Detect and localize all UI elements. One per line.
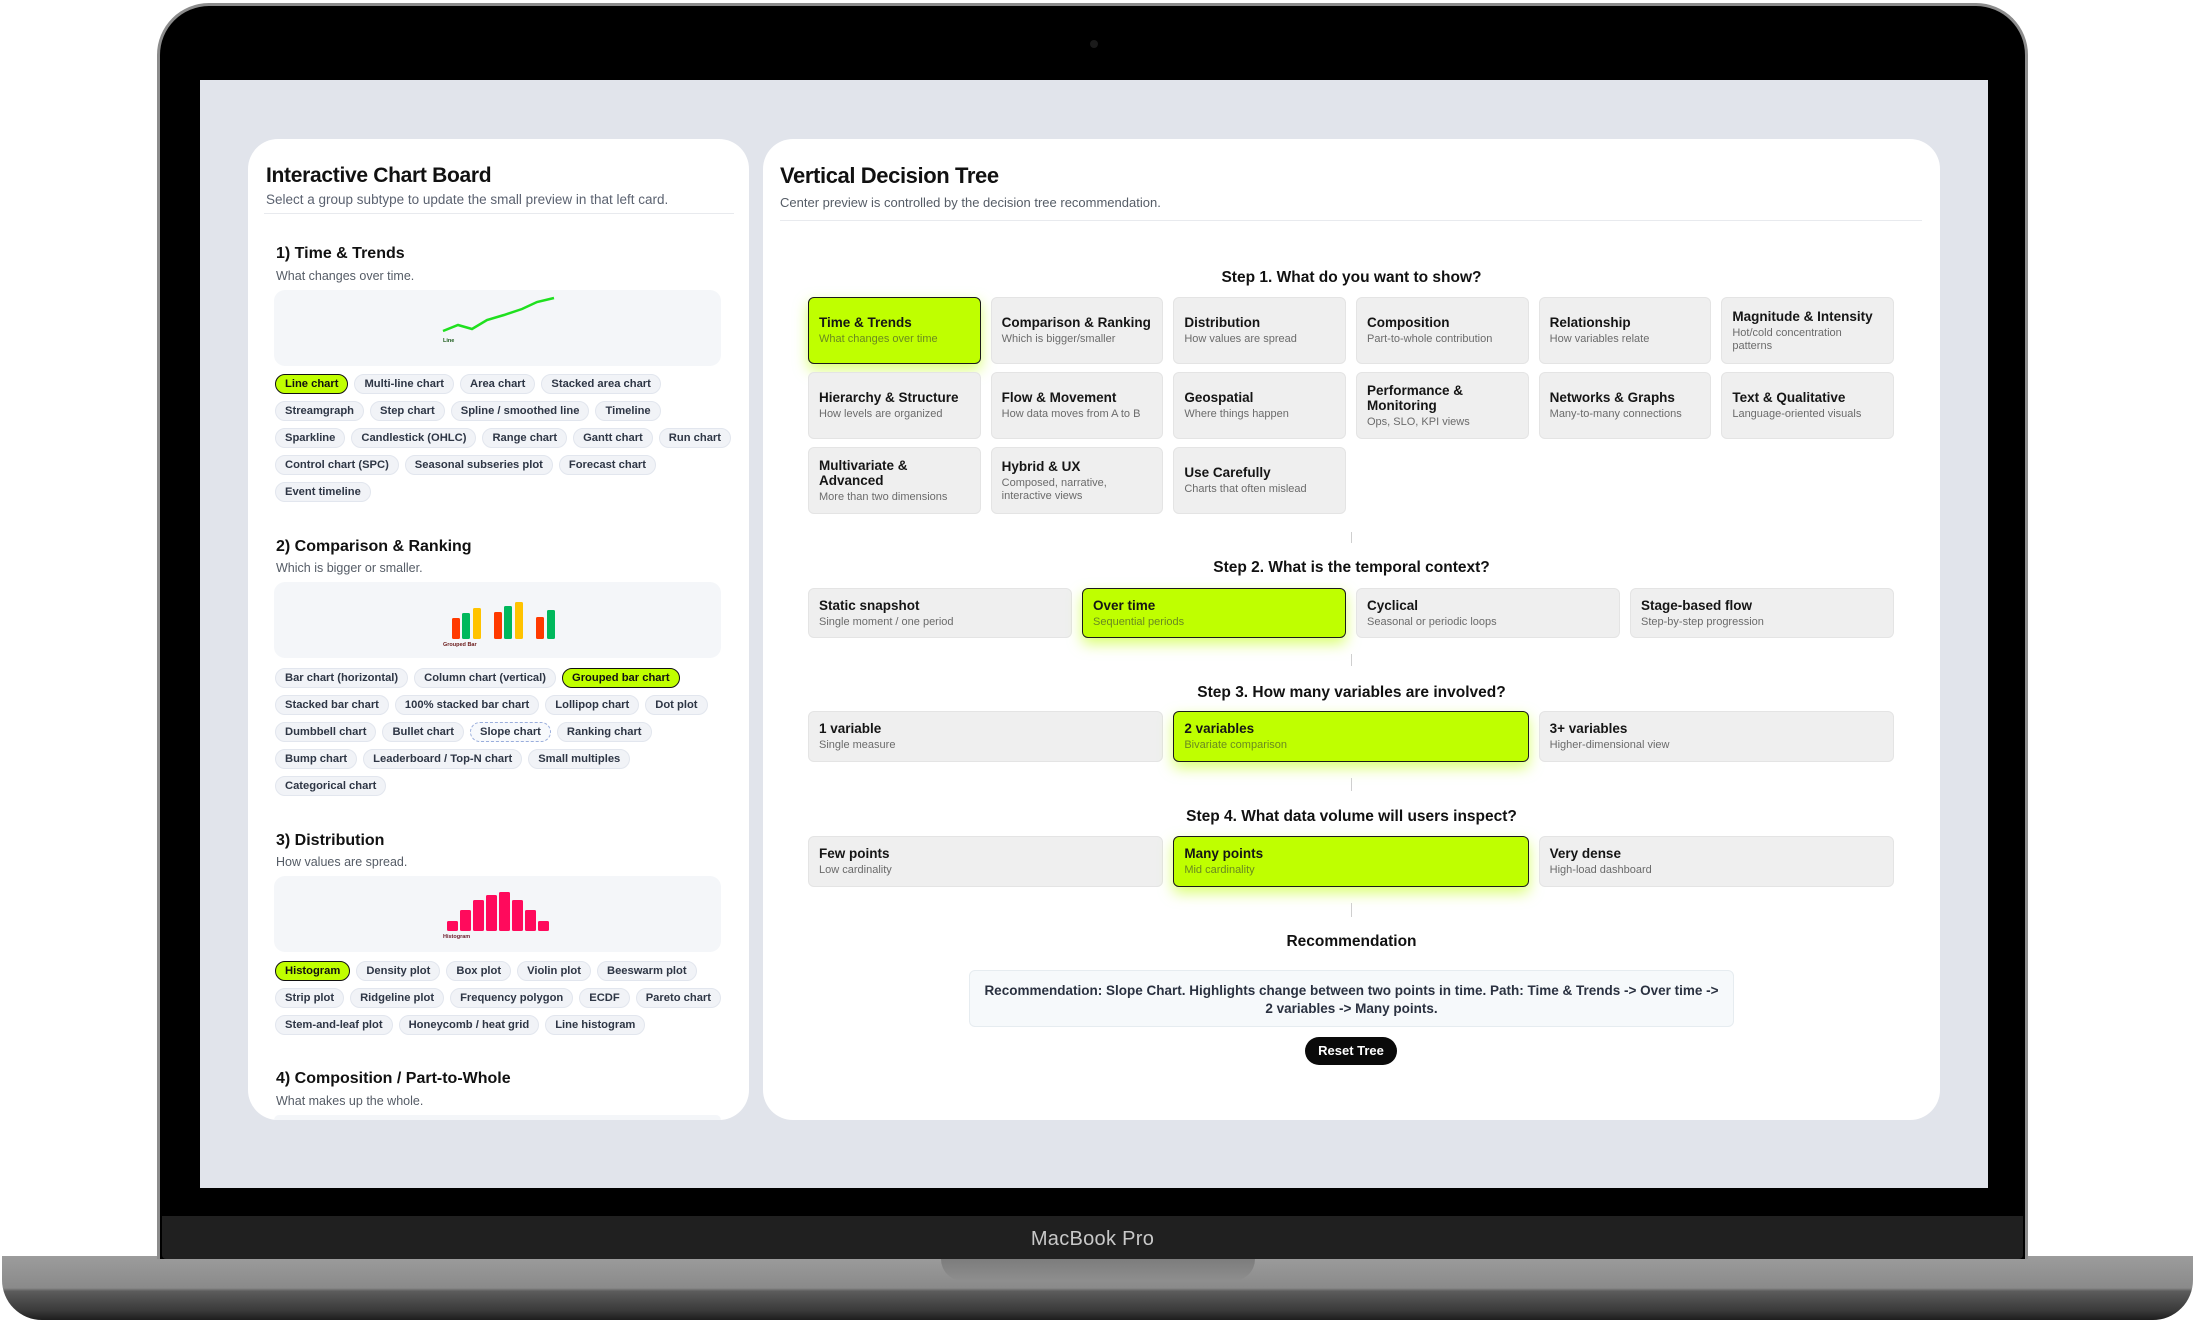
step 1 options grid: What changes over time bbox=[819, 333, 938, 345]
chips: distribution: Violin plot bbox=[527, 965, 581, 977]
chips: comparison: Bullet chart bbox=[392, 726, 454, 738]
chips: distribution: Frequency polygon bbox=[460, 992, 563, 1004]
chips: distribution: Histogram bbox=[285, 965, 340, 977]
step 1 options grid: Part-to-whole contribution bbox=[1367, 333, 1492, 345]
button: Reset Tree bbox=[1305, 1037, 1397, 1065]
recommendation heading: Recommendation bbox=[1286, 933, 1417, 950]
chin bbox=[162, 1216, 2023, 1259]
title: Interactive Chart Board: Interactive Chart Board bbox=[266, 164, 491, 187]
step 1 options grid: Which is bigger/smaller bbox=[1002, 333, 1115, 345]
camera bbox=[1090, 40, 1098, 48]
step 1 options grid: Distribution bbox=[1184, 315, 1260, 330]
chips: distribution: ECDF bbox=[589, 992, 620, 1004]
base notch bbox=[941, 1256, 1255, 1281]
chips: comparison: Stacked bar chart bbox=[285, 699, 379, 711]
step 4 options: Low cardinality bbox=[819, 864, 892, 876]
step 3 options: 2 variables bbox=[1184, 721, 1254, 736]
step 1 options grid: Composed, narrative, interactive views bbox=[1002, 476, 1107, 502]
chips: distribution: Density plot bbox=[366, 965, 430, 977]
step 1 options grid: Use Carefully bbox=[1184, 465, 1271, 480]
chips: time & trends bbox=[275, 374, 731, 502]
step 1 options grid: How values are spread bbox=[1184, 333, 1297, 345]
chips: comparison: Lollipop chart bbox=[555, 699, 629, 711]
chips: time & trends: Seasonal subseries plot bbox=[415, 459, 543, 471]
chips: time & trends: Stacked area chart bbox=[551, 378, 651, 390]
step 1 options grid: Flow & Movement bbox=[1002, 390, 1116, 405]
chips: time & trends: Step chart bbox=[380, 405, 435, 417]
preview: line chart bbox=[274, 290, 721, 366]
group sub 4: What makes up the whole. bbox=[276, 1094, 423, 1108]
step 1 options grid: How variables relate bbox=[1550, 333, 1649, 345]
chips: distribution: Ridgeline plot bbox=[360, 992, 434, 1004]
step 1 options grid: Networks & Graphs bbox=[1550, 390, 1675, 405]
chips: time & trends: Run chart bbox=[669, 432, 721, 444]
step 1 options grid: Ops, SLO, KPI views bbox=[1367, 416, 1470, 428]
step 3 options: 1 variable bbox=[819, 721, 881, 736]
step 1 options grid: Relationship bbox=[1550, 315, 1631, 330]
step 1 options grid: Text & Qualitative bbox=[1732, 390, 1845, 405]
chips: comparison: Slope chart bbox=[480, 726, 541, 738]
step 3 options bbox=[808, 706, 1894, 778]
chips: comparison: Bump chart bbox=[285, 753, 347, 765]
group sub 3: How values are spread. bbox=[276, 855, 407, 869]
laptop base bbox=[2, 1256, 2193, 1320]
step 1 options grid: Performance & Monitoring bbox=[1367, 382, 1463, 412]
chips: time & trends: Gantt chart bbox=[583, 432, 643, 444]
subtitle left: Select a group subtype to update the small preview in that left card. bbox=[266, 192, 668, 207]
chips: comparison: Grouped bar chart bbox=[572, 672, 670, 684]
chips: comparison: Categorical chart bbox=[285, 780, 376, 792]
step 2 options: Step-by-step progression bbox=[1641, 616, 1764, 628]
chips: time & trends: Event timeline bbox=[285, 486, 361, 498]
group sub 1: What changes over time. bbox=[276, 269, 414, 283]
recommendation box: Recommendation: Slope Chart. Highlights change between two points in time. Path: Time & Trends -> Over time -> bbox=[984, 983, 1719, 998]
chips: comparison: Small multiples bbox=[538, 753, 620, 765]
chips: time & trends: Range chart bbox=[492, 432, 557, 444]
step 1 options grid: Composition bbox=[1367, 315, 1450, 330]
group heading 1: 1) Time & Trends bbox=[276, 245, 405, 262]
step 1 options grid: How data moves from A to B bbox=[1002, 408, 1140, 420]
step 2 heading: Step 2. What is the temporal context? bbox=[1213, 559, 1490, 576]
chips: comparison: 100% stacked bar chart bbox=[405, 699, 529, 711]
chips: time & trends: Forecast chart bbox=[569, 459, 646, 471]
button: Reset Tree: Reset Tree bbox=[1318, 1043, 1384, 1058]
chips: time & trends: Multi-line chart bbox=[364, 378, 444, 390]
step 1 options grid: Charts that often mislead bbox=[1184, 483, 1307, 495]
chips: comparison: Dot plot bbox=[655, 699, 698, 711]
chips: distribution: Pareto chart bbox=[646, 992, 711, 1004]
step 4 options: Few points bbox=[819, 846, 890, 861]
step 1 options grid: Language-oriented visuals bbox=[1732, 408, 1861, 420]
step 4 options bbox=[808, 832, 1894, 904]
step 1 heading: Step 1. What do you want to show? bbox=[1221, 269, 1482, 286]
step 1 options grid: Hot/cold concentration patterns bbox=[1732, 326, 1842, 352]
step 2 options: Sequential periods bbox=[1093, 616, 1184, 628]
chips: comparison: Leaderboard / Top-N chart bbox=[373, 753, 512, 765]
step 1 options grid: Multivariate & Advanced bbox=[819, 458, 908, 488]
step 3 options: Single measure bbox=[819, 739, 895, 751]
step 4 options: High-load dashboard bbox=[1550, 864, 1652, 876]
step 2 options: Over time bbox=[1093, 598, 1155, 612]
panel: vertical decision tree bbox=[763, 139, 1940, 1120]
step 2 options: Static snapshot bbox=[819, 598, 920, 612]
chips: comparison: Dumbbell chart bbox=[285, 726, 366, 738]
chips: distribution: Stem-and-leaf plot bbox=[285, 1019, 383, 1031]
step 3 options: Bivariate comparison bbox=[1184, 739, 1287, 751]
step 3 heading: Step 3. How many variables are involved? bbox=[1197, 684, 1506, 701]
step 2 options: Single moment / one period bbox=[819, 616, 954, 628]
group sub 2: Which is bigger or smaller. bbox=[276, 561, 423, 575]
preview: line chart: Line bbox=[443, 338, 454, 344]
step 1 options grid: How levels are organized bbox=[819, 408, 943, 420]
step 3 options: Higher-dimensional view bbox=[1550, 739, 1670, 751]
chips: time & trends: Spline / smoothed line bbox=[461, 405, 579, 417]
step 2 options bbox=[808, 584, 1894, 654]
chips: distribution: Line histogram bbox=[555, 1019, 635, 1031]
chips: comparison bbox=[275, 668, 708, 796]
chips: time & trends: Sparkline bbox=[285, 432, 335, 444]
chips: time & trends: Control chart (SPC) bbox=[285, 459, 389, 471]
step 1 options grid: Time & Trends bbox=[819, 315, 912, 330]
step 1 options grid: Magnitude & Intensity bbox=[1732, 308, 1873, 324]
group heading 4: 4) Composition / Part-to-Whole bbox=[276, 1070, 511, 1087]
screen bbox=[200, 80, 1988, 1188]
step 2 options: Stage-based flow bbox=[1641, 598, 1752, 612]
step 1 options grid: Geospatial bbox=[1184, 390, 1253, 405]
step 3 options: 3+ variables bbox=[1550, 721, 1627, 736]
title: Vertical Decision Tree: Vertical Decision Tree bbox=[780, 163, 999, 188]
chips: distribution: Box plot bbox=[456, 965, 501, 977]
recommendation box: 2 variables -> Many points. bbox=[1265, 1001, 1438, 1016]
recommendation box bbox=[969, 970, 1734, 1027]
step 1 options grid: Many-to-many connections bbox=[1550, 408, 1682, 420]
step 2 options: Cyclical bbox=[1367, 598, 1418, 612]
step 4 options: Mid cardinality bbox=[1184, 864, 1255, 876]
preview: histogram: Histogram bbox=[443, 934, 470, 940]
step 1 options grid: Comparison & Ranking bbox=[1002, 315, 1151, 330]
step 4 options: Very dense bbox=[1550, 846, 1621, 861]
preview: grouped bar bbox=[274, 582, 721, 658]
group heading 2: 2) Comparison & Ranking bbox=[276, 538, 472, 555]
step 1 options grid: More than two dimensions bbox=[819, 490, 947, 502]
group heading 3: 3) Distribution bbox=[276, 832, 384, 849]
panel: interactive chart board bbox=[248, 139, 749, 1120]
chips: distribution: Honeycomb / heat grid bbox=[409, 1019, 529, 1031]
chips: time & trends: Candlestick (OHLC) bbox=[361, 432, 466, 444]
step 1 options grid: Where things happen bbox=[1184, 408, 1289, 420]
chips: distribution: Strip plot bbox=[285, 992, 334, 1004]
chips: time & trends: Area chart bbox=[470, 378, 525, 390]
chips: comparison: Ranking chart bbox=[567, 726, 642, 738]
preview: grouped bar: Grouped Bar bbox=[443, 642, 477, 648]
step 4 heading: Step 4. What data volume will users inspect? bbox=[1186, 808, 1517, 825]
step 1 options grid: Hierarchy & Structure bbox=[819, 390, 959, 405]
chips: distribution bbox=[275, 961, 721, 1035]
subtitle right: Center preview is controlled by the decision tree recommendation. bbox=[780, 195, 1161, 210]
step 2 options: Seasonal or periodic loops bbox=[1367, 616, 1497, 628]
step 1 options grid: Hybrid & UX bbox=[1002, 458, 1080, 474]
chips: comparison: Column chart (vertical) bbox=[424, 672, 546, 684]
chips: time & trends: Line chart bbox=[285, 378, 338, 390]
chips: time & trends: Timeline bbox=[605, 405, 651, 417]
preview: histogram bbox=[274, 876, 721, 952]
chips: distribution: Beeswarm plot bbox=[607, 965, 687, 977]
chips: comparison: Bar chart (horizontal) bbox=[285, 672, 398, 684]
step 4 options: Many points bbox=[1184, 846, 1263, 861]
chips: time & trends: Streamgraph bbox=[285, 405, 354, 417]
label: MacBook Pro: MacBook Pro bbox=[1031, 1228, 1154, 1250]
step 1 options grid bbox=[798, 292, 1894, 514]
